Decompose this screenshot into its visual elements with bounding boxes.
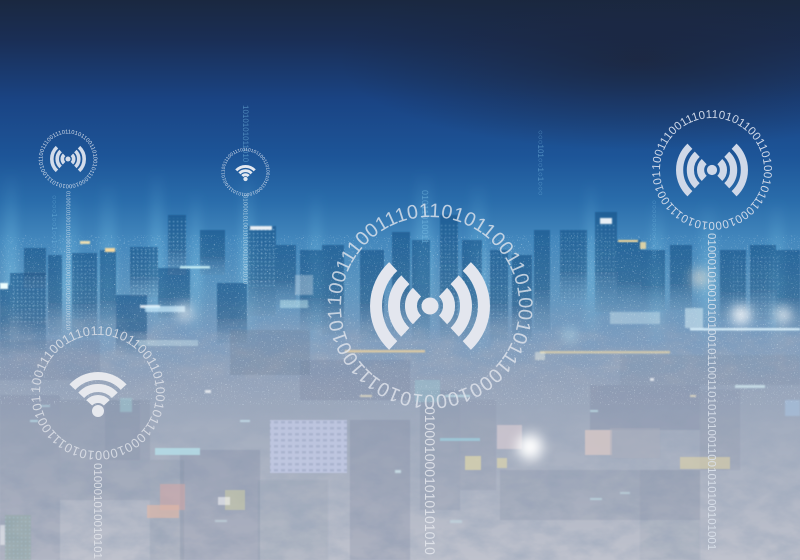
binary ring: 100111001110110101100110100101110001000101011100101 xyxy=(652,110,772,230)
binary ring: 100111001110110101100110100101110001000101011100101 xyxy=(221,148,270,196)
faint data columns: ○○○○○○○○○○○○○ xyxy=(650,200,659,259)
icon: broadcast signal xyxy=(376,266,484,346)
faint data columns xyxy=(50,105,659,259)
icon: wifi xyxy=(72,376,124,417)
node: lower-left wifi xyxy=(31,326,165,460)
faint data columns: 01011010011 xyxy=(420,190,430,244)
node: large central signal xyxy=(328,204,533,409)
illuminated buildings xyxy=(5,340,730,560)
faint data columns: ○○○101○○1○1○○○ xyxy=(536,130,545,196)
binary ring: 100111001110110101100110100101110001000101011100101 xyxy=(31,326,165,460)
light rays over skyline xyxy=(4,170,784,360)
node: small wifi xyxy=(221,148,270,196)
node: upper-left small signal xyxy=(38,130,98,188)
icon: broadcast signal xyxy=(680,146,744,194)
glowing spots xyxy=(177,269,790,460)
faint data columns: 1010101011010 xyxy=(241,105,250,163)
city lights xyxy=(0,218,800,545)
faint data columns: ○○○○1○○1○○1○○○ xyxy=(50,195,59,257)
binary column from left small signal node: 01000101001010100101001010010100100101001010 xyxy=(64,191,70,330)
lower city blocks xyxy=(0,330,800,560)
speckled window lights xyxy=(0,235,800,405)
mottled lower city texture xyxy=(0,300,800,560)
binary ring: 100111001110110101100110100101110001000101011100101 xyxy=(328,204,533,409)
binary column from small wifi node: 01000101001010100101001010 xyxy=(242,195,249,285)
node: upper-right signal xyxy=(652,110,772,230)
icon: wifi xyxy=(236,166,255,181)
building windows xyxy=(10,218,780,325)
binary ring: 100111001110110101100110100101110001000101011100101 xyxy=(38,130,98,188)
skyline buildings xyxy=(0,212,800,355)
icon: broadcast signal xyxy=(52,147,84,171)
binary column from large central node: 0100010001010101010 xyxy=(422,407,438,555)
binary column from lower-left wifi node: 010001010010101 xyxy=(91,463,103,559)
binary column from right node: 01000101001010100101100110101010011001010100101001 xyxy=(705,233,717,550)
